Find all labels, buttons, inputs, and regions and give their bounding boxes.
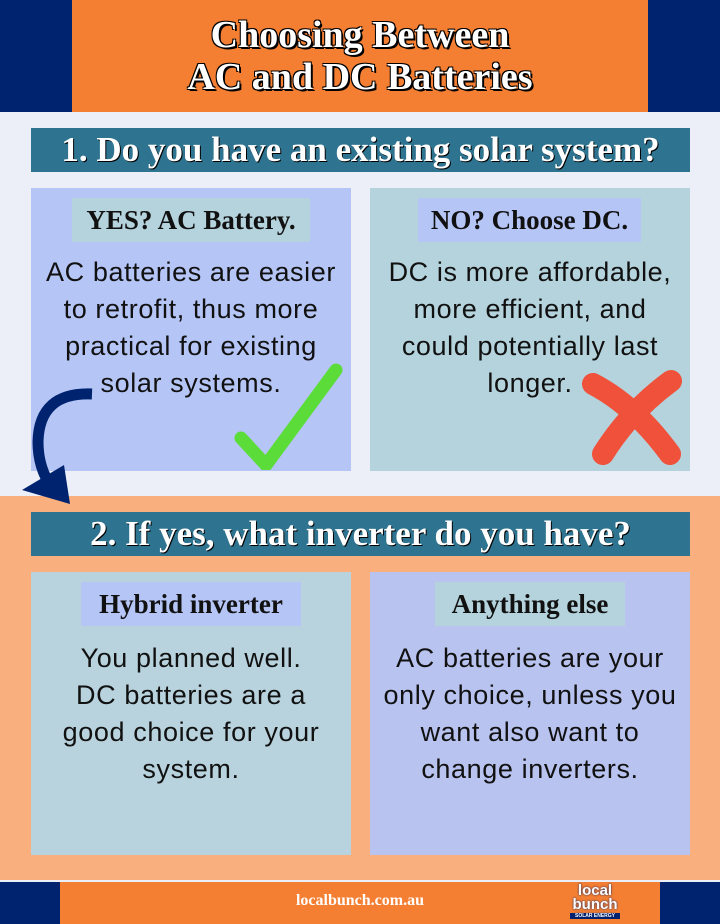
text: DC: DC is more affordable, [389,257,671,287]
header [0,0,720,112]
icon: cross [582,370,682,465]
tag: anything else [435,582,625,626]
text: anything else: only choice, unless you [384,680,676,710]
panel: hybrid [31,572,351,855]
text: DC: longer. [487,368,573,398]
tag: yes: YES? AC Battery. [86,205,296,235]
footer bar [60,882,660,924]
text: DC: could potentially last [402,331,658,361]
text: anything else: change inverters. [421,754,639,784]
icon: check [234,364,342,470]
text: AC [46,257,336,398]
text: AC: AC batteries are easier [46,257,336,287]
panel: no DC [370,188,690,471]
text: anything else [384,643,676,784]
tag: anything else: Anything else [452,589,608,619]
peach band [0,496,720,880]
panel: anything else [370,572,690,855]
tag: hybrid [81,582,301,626]
text: hybrid: good choice for your [63,717,319,747]
logo: local [578,882,612,899]
tag: no: NO? Choose DC. [431,205,628,235]
text: anything else: AC batteries are your [396,643,664,673]
title: AC and DC Batteries [187,56,533,98]
tag: hybrid: Hybrid inverter [99,589,283,619]
text: anything else: want also want to [421,717,639,747]
section 2 heading: 2. If yes, what inverter do you have? [90,514,631,553]
title: Choosing Between [211,14,509,56]
text: hybrid: DC batteries are a [76,680,306,710]
panel: yes AC [31,188,351,471]
text: DC [389,257,671,398]
title [72,0,648,112]
tag: no [418,198,641,242]
footer [0,882,720,924]
text: hybrid: You planned well. [81,643,301,673]
logo [570,882,620,919]
text: hybrid: system. [142,754,240,784]
section 1 heading: 1. Do you have an existing solar system? [61,130,660,169]
logo: SOLAR ENERGY [575,913,615,919]
text: DC: more efficient, and [413,294,647,324]
text: AC: practical for existing [65,331,317,361]
text: AC: to retrofit, thus more [64,294,318,324]
tag: yes [72,198,310,242]
text: AC: solar systems. [101,368,281,398]
text: hybrid [63,643,319,784]
website: localbunch.com.au [296,892,424,909]
logo: bunch [572,896,618,913]
arrow [22,388,92,504]
